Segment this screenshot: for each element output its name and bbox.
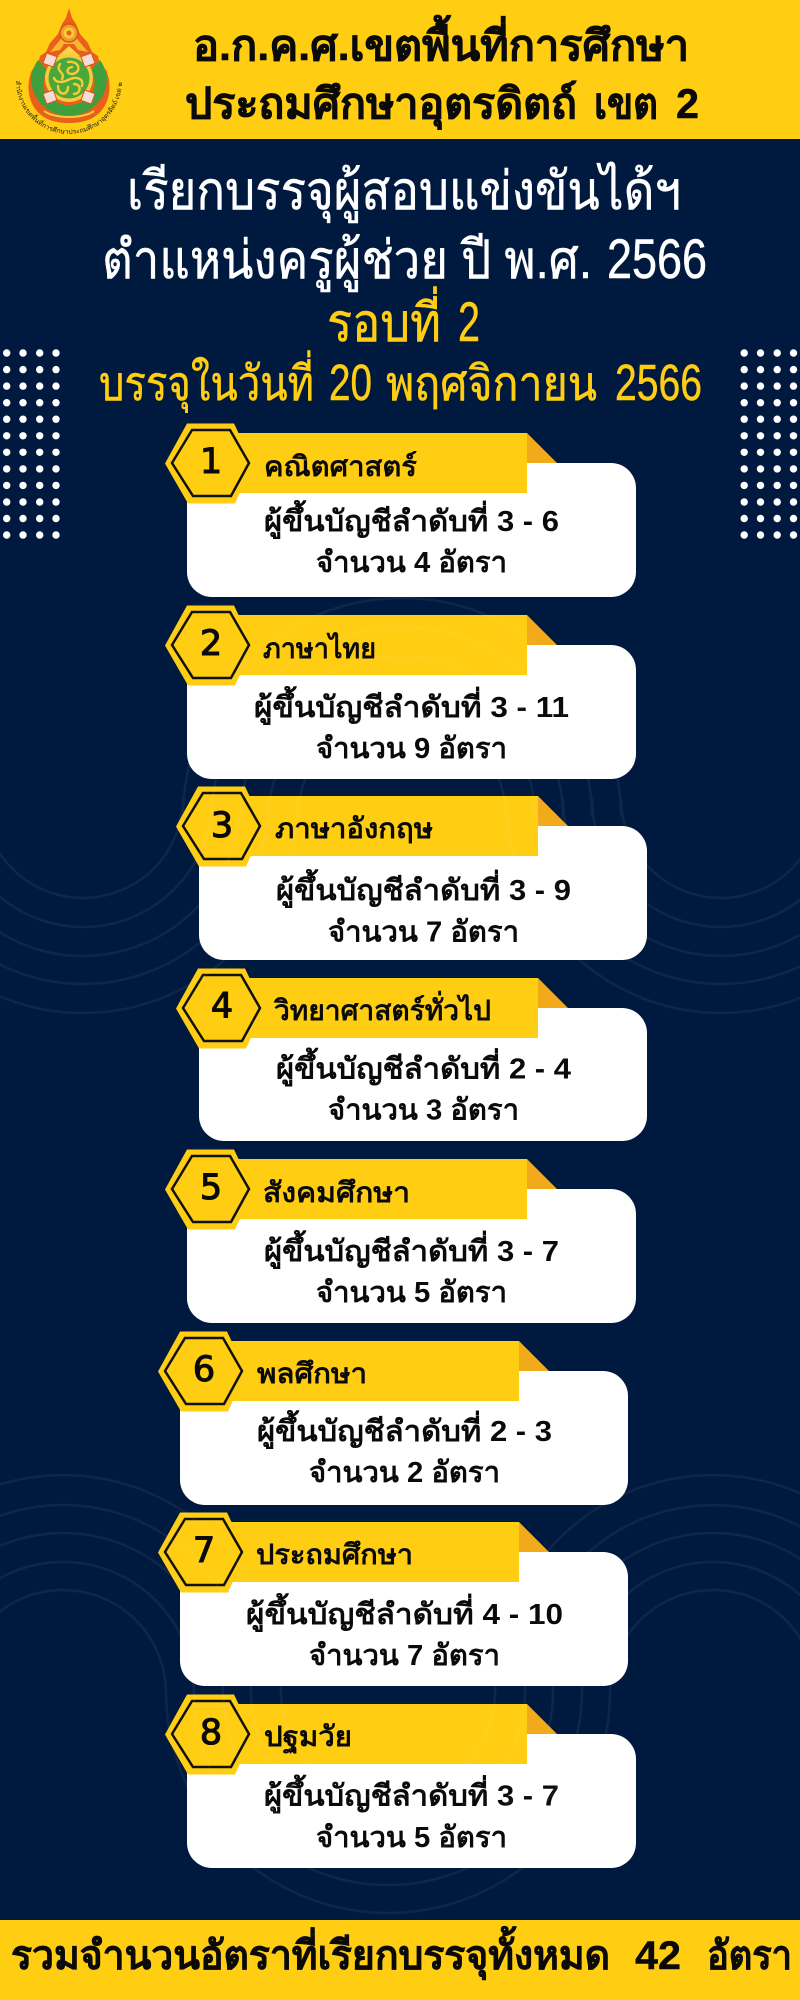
number hexagon: 7 (193, 1531, 215, 1571)
ribbon fold (519, 1341, 549, 1371)
ribbon fold (527, 433, 557, 463)
ranks and count: ผู้ขึ้นบัญชีลำดับที่ 2 - 4 (276, 1046, 571, 1086)
ribbon (239, 978, 538, 1038)
card 3: ภาษาอังกฤษ (176, 786, 647, 960)
ribbon (220, 1341, 519, 1401)
ribbon (227, 1704, 527, 1764)
title block: 2 (458, 290, 480, 353)
ranks and count (276, 868, 571, 948)
ranks and count: ผู้ขึ้นบัญชีลำดับที่ 3 - 7 (264, 1774, 559, 1814)
number hexagon: 4 (211, 986, 233, 1026)
title block: พฤศจิกายน (386, 358, 597, 411)
ranks and count: จำนวน 9 อัตรา (316, 733, 507, 765)
ranks and count (254, 685, 569, 765)
footer band: total positions (0, 1920, 800, 2000)
ranks and count (257, 1409, 552, 1489)
title block: รอบที่ (327, 286, 441, 353)
ranks and count: จำนวน 4 อัตรา (316, 547, 507, 579)
ranks and count (276, 1046, 571, 1126)
card 2: ภาษาไทย (165, 606, 636, 779)
subject label: วิทยาศาสตร์ทั่วไป (273, 990, 491, 1026)
number hexagon (158, 1332, 246, 1412)
ribbon fold (519, 1522, 549, 1552)
ribbon (227, 1159, 527, 1219)
ribbon (227, 433, 527, 493)
white body (199, 826, 647, 960)
subject label: ภาษาไทย (263, 632, 376, 664)
icon: OBEC district emblem (16, 8, 122, 134)
number hexagon: 6 (193, 1350, 215, 1390)
heading: office name: 2 (676, 80, 699, 127)
footer band: total positions: รวมจำนวนอัตราที่เรียกบรรจุทั้งหมด (11, 1926, 610, 1981)
ranks and count: ผู้ขึ้นบัญชีลำดับที่ 3 - 11 (254, 685, 569, 725)
title block: 20 (329, 354, 372, 411)
white body (180, 1371, 628, 1505)
heading: office name (185, 14, 699, 130)
ribbon fold (538, 978, 568, 1008)
ranks and count: ผู้ขึ้นบัญชีลำดับที่ 3 - 9 (276, 868, 571, 908)
white body (187, 463, 636, 597)
ribbon (227, 615, 527, 675)
ribbon (239, 796, 538, 856)
subject label: คณิตศาสตร์ (264, 451, 417, 482)
footer band: total positions: อัตรา (707, 1934, 792, 1978)
ranks and count (264, 1774, 559, 1854)
ranks and count: ผู้ขึ้นบัญชีลำดับที่ 3 - 6 (264, 499, 559, 539)
icon: OBEC district emblem: สำนักงานเขตพื้นที่การศึกษาประถมศึกษาอุตรดิตถ์ เขต ๒ (16, 81, 122, 134)
white body (187, 1734, 636, 1868)
subject label: ภาษาอังกฤษ (275, 813, 433, 844)
ranks and count: ผู้ขึ้นบัญชีลำดับที่ 2 - 3 (257, 1409, 552, 1449)
ribbon fold (527, 1704, 557, 1734)
ranks and count: จำนวน 2 อัตรา (309, 1457, 500, 1489)
title block (99, 161, 707, 413)
number hexagon (165, 606, 253, 686)
title block: ตำแหน่งครูผู้ช่วย ปี พ.ศ. (102, 231, 592, 292)
title block: บรรจุในวันที่ (99, 350, 314, 413)
heading: office name: เขต (594, 80, 658, 127)
white body (187, 645, 636, 779)
card 1: คณิตศาสตร์ (165, 424, 636, 597)
ranks and count (246, 1592, 563, 1672)
number hexagon: 8 (200, 1713, 222, 1753)
card 7: ประถมศึกษา (158, 1512, 628, 1686)
ribbon fold (527, 615, 557, 645)
white body (199, 1008, 647, 1141)
ribbon (220, 1522, 519, 1582)
ranks and count: จำนวน 5 อัตรา (316, 1822, 507, 1854)
ranks and count: จำนวน 3 อัตรา (328, 1094, 519, 1126)
header band (0, 0, 800, 139)
dot grid right (740, 349, 797, 539)
ranks and count (264, 1229, 559, 1309)
ranks and count: ผู้ขึ้นบัญชีลำดับที่ 4 - 10 (246, 1592, 563, 1632)
ranks and count: จำนวน 7 อัตรา (328, 916, 519, 948)
number hexagon: 2 (200, 624, 222, 664)
ranks and count: ผู้ขึ้นบัญชีลำดับที่ 3 - 7 (264, 1229, 559, 1269)
white body (187, 1189, 636, 1323)
card 4: วิทยาศาสตร์ทั่วไป (176, 968, 647, 1141)
number hexagon (165, 1694, 253, 1774)
card 6: พลศึกษา (158, 1332, 628, 1505)
card 8: ปฐมวัย (165, 1694, 636, 1868)
subject label: พลศึกษา (257, 1358, 367, 1389)
ranks and count (264, 499, 559, 579)
ranks and count: จำนวน 7 อัตรา (309, 1640, 500, 1672)
title block: เรียกบรรจุผู้สอบแข่งขันได้ฯ (127, 161, 681, 223)
ribbon fold (527, 1159, 557, 1189)
card 5: สังคมศึกษา (165, 1150, 636, 1323)
white body (180, 1552, 628, 1686)
number hexagon (176, 786, 264, 866)
number hexagon (165, 424, 253, 504)
number hexagon (176, 968, 264, 1048)
dot grid left (3, 349, 60, 539)
subject label: ประถมศึกษา (256, 1539, 413, 1570)
title block: 2566 (607, 227, 707, 290)
number hexagon: 1 (200, 442, 222, 482)
number hexagon (158, 1512, 246, 1592)
number hexagon: 5 (200, 1168, 222, 1208)
subject label: สังคมศึกษา (263, 1177, 410, 1208)
title block: 2566 (615, 354, 702, 411)
ribbon fold (538, 796, 568, 826)
number hexagon: 3 (211, 806, 233, 846)
ranks and count: จำนวน 5 อัตรา (316, 1277, 507, 1309)
number hexagon (165, 1150, 253, 1230)
heading: office name: ประถมศึกษาอุตรดิตถ์ (185, 80, 577, 130)
subject label: ปฐมวัย (264, 1721, 352, 1755)
footer band: total positions: 42 (635, 1934, 681, 1978)
heading: office name: อ.ก.ค.ศ.เขตพื้นที่การศึกษา (193, 14, 689, 69)
